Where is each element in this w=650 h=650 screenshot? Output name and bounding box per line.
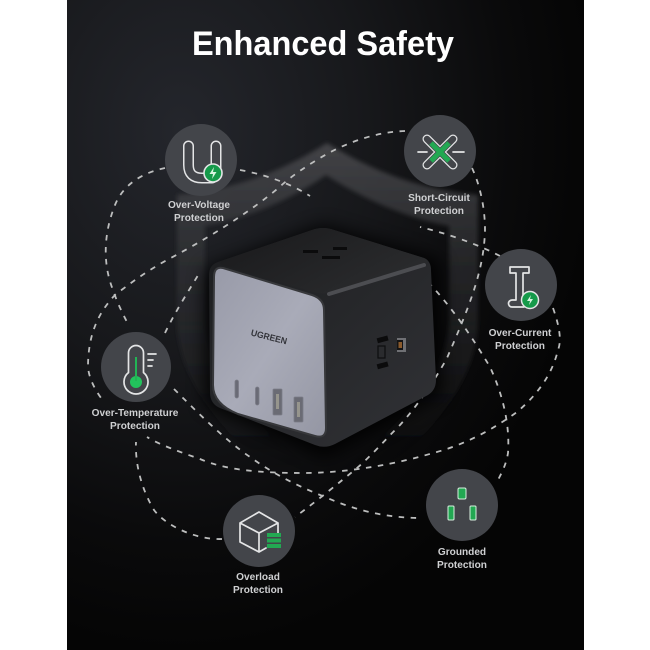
logo: UGREEN (250, 328, 288, 346)
item: Grounded Protection: Protection (437, 560, 487, 571)
item: Over-Temperature Protection (92, 332, 179, 432)
item: Overload Protection: Protection (233, 585, 283, 596)
item: Over-Temperature Protection: Protection (110, 421, 160, 432)
cube body (209, 228, 436, 447)
dashed orbit lines (88, 131, 560, 539)
item: Grounded Protection: Grounded (438, 547, 486, 558)
item: Overload Protection (223, 495, 295, 596)
item: Overload Protection: Overload (236, 572, 280, 583)
shield backdrop (177, 143, 478, 512)
item: Over-Voltage Protection: Protection (174, 213, 224, 224)
cube top face (218, 228, 428, 294)
item: Short-Circuit Protection: Short-Circuit (408, 193, 470, 204)
item: Over-Current Protection (485, 249, 557, 352)
top edge highlight (329, 265, 424, 294)
side socket (377, 336, 406, 369)
item: Short-Circuit Protection (404, 115, 476, 217)
USB ports (235, 380, 303, 422)
cube front face (213, 268, 326, 437)
cube shadow (205, 225, 442, 458)
item: Over-Current Protection: Protection (495, 341, 545, 352)
item: Over-Temperature Protection: Over-Temperature (92, 408, 179, 419)
item: Grounded Protection (426, 469, 498, 571)
product: UGREEN power cube (209, 228, 436, 447)
item: Over-Voltage Protection: Over-Voltage (168, 200, 230, 211)
item: Short-Circuit Protection: Protection (414, 206, 464, 217)
background panel (67, 0, 584, 650)
title: Enhanced Safety (192, 25, 454, 63)
top socket (303, 247, 347, 259)
item: Over-Current Protection: Over-Current (489, 328, 552, 339)
item: Over-Voltage Protection (165, 124, 237, 224)
